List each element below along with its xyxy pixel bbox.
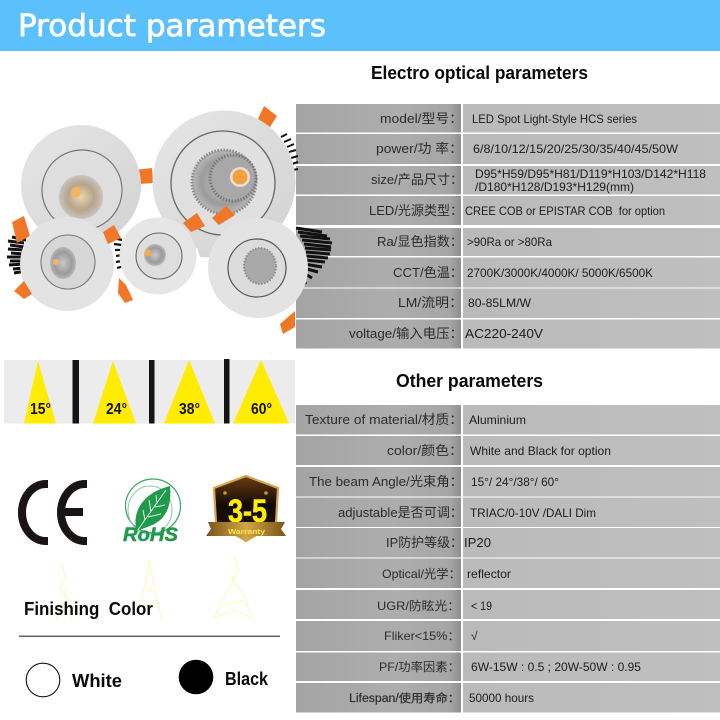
- row: voltage: [296, 320, 720, 348]
- icon: warranty shield: [206, 476, 286, 541]
- row: LED: LED/光源类型：: [369, 203, 463, 218]
- row: flicker: √: [471, 629, 478, 643]
- row: adjustable: TRIAC/0-10V /DALI Dim: [470, 506, 596, 520]
- row: IP: IP防护等级：: [386, 535, 463, 550]
- row: lifespan: [296, 683, 720, 712]
- row: CCT: 2700K/3000K/4000K/ 5000K/6500K: [467, 266, 653, 280]
- row: size: [296, 166, 720, 194]
- heading: electro optical: Electro optical parameters: [371, 63, 588, 83]
- row: UGR: < 19: [471, 599, 492, 613]
- row: IP: IP20: [464, 535, 491, 550]
- row: power: power/功 率：: [376, 141, 463, 156]
- row: adjustable: [296, 498, 720, 527]
- heading: finishing color: Finishing Color: [24, 599, 153, 619]
- icon: warranty shield: Warranty: [228, 527, 266, 536]
- row: lifespan: Lifespan/使用寿命：: [349, 691, 460, 705]
- row: flicker: Fliker<15%：: [384, 629, 460, 643]
- product photo: downlights: [7, 106, 332, 334]
- row: LM: [296, 288, 720, 318]
- swatch: black: [179, 660, 269, 694]
- row: voltage: voltage/输入电压：: [349, 326, 463, 341]
- row: color: White and Black for option: [470, 444, 611, 458]
- row: LM: LM/流明：: [398, 295, 463, 310]
- row: color: color/颜色：: [387, 443, 463, 458]
- row: size: size/产品尺寸：: [371, 172, 463, 187]
- icon: RoHS: [123, 479, 180, 546]
- row: voltage: AC220-240V: [465, 326, 543, 341]
- row: power: 6/8/10/12/15/20/25/30/35/40/45/50W: [473, 142, 679, 156]
- row: texture of material: Aluminium: [469, 413, 526, 427]
- row: texture of material: [296, 405, 720, 434]
- row: Ra: [296, 228, 720, 256]
- beam angle strip: [4, 359, 295, 424]
- swatch: white: [26, 663, 122, 697]
- icon: warranty shield: 3-5: [228, 493, 267, 529]
- beam 15: 15°: [30, 401, 51, 418]
- row: optical: [296, 558, 720, 588]
- beam 60: 60°: [251, 401, 272, 418]
- swatch: white: White: [72, 671, 122, 691]
- row: optical: Optical/光学：: [382, 566, 461, 581]
- row: Ra: >90Ra or >80Ra: [467, 235, 552, 249]
- row: lifespan: 50000 hours: [469, 691, 534, 705]
- row: PF: 6W-15W : 0.5 ; 20W-50W : 0.95: [471, 660, 641, 674]
- row: UGR: UGR/防眩光：: [377, 598, 460, 613]
- swatch: black: Black: [225, 669, 269, 689]
- beam 24: 24°: [106, 401, 127, 418]
- row: LED: [296, 196, 720, 225]
- title: Product parameters: [18, 9, 326, 44]
- heading: other parameters: Other parameters: [396, 371, 543, 391]
- row: optical: reflector: [467, 567, 511, 581]
- panel: electro optical parameters: [296, 63, 720, 348]
- faint flame marks: [56, 555, 252, 620]
- row: texture of material: Texture of material/材质：: [305, 412, 463, 427]
- heatsink fins: [7, 134, 332, 284]
- row: beam angle: The beam Angle/光束角：: [309, 474, 463, 489]
- row: model: model/型号：: [380, 111, 463, 126]
- icon: CE mark: [22, 484, 87, 541]
- panel: other parameters: [296, 371, 720, 712]
- row: PF: PF/功率因素：: [379, 659, 460, 674]
- row: UGR: [296, 590, 720, 619]
- lamp: bottom left: [20, 217, 114, 311]
- row: size: D95*H59/D95*H81/D119*H103/D142*H118: [475, 167, 706, 181]
- row: beam angle: [296, 467, 720, 496]
- header banner: [0, 0, 720, 51]
- finishing colour section: [19, 599, 280, 697]
- row: adjustable: adjustable是否可调：: [338, 505, 463, 520]
- lamp: top left: [21, 125, 141, 245]
- beam 38: [164, 360, 215, 424]
- lamp: large top right: [152, 110, 296, 258]
- beam 60: [233, 360, 289, 424]
- row: color: [296, 436, 720, 465]
- row: power: [296, 134, 720, 164]
- icon: RoHS: RoHS: [123, 525, 178, 546]
- orange clips behind lamps: [12, 106, 277, 243]
- row: IP: [296, 528, 720, 558]
- row: Ra: Ra/显色指数：: [377, 234, 463, 249]
- row: flicker: [296, 621, 720, 651]
- row: LED: CREE COB or EPISTAR COB for option: [465, 204, 665, 218]
- row: model: LED Spot Light-Style HCS series: [472, 112, 637, 126]
- row: CCT: CCT/色温：: [393, 265, 463, 280]
- row: CCT: [296, 258, 720, 288]
- row: size: /D180*H128/D193*H129(mm): [475, 180, 634, 194]
- orange clips in front: [14, 206, 295, 334]
- beam 24: [93, 361, 136, 424]
- row: model: [296, 104, 720, 132]
- lamp: bottom centre: [120, 218, 196, 294]
- beam 38: 38°: [179, 401, 200, 418]
- row: LM: 80-85LM/W: [468, 296, 532, 310]
- row: beam angle: 15°/ 24°/38°/ 60°: [471, 475, 559, 489]
- lamp: bottom right: [208, 218, 308, 318]
- beam 15: [24, 361, 56, 424]
- row: PF: [296, 652, 720, 681]
